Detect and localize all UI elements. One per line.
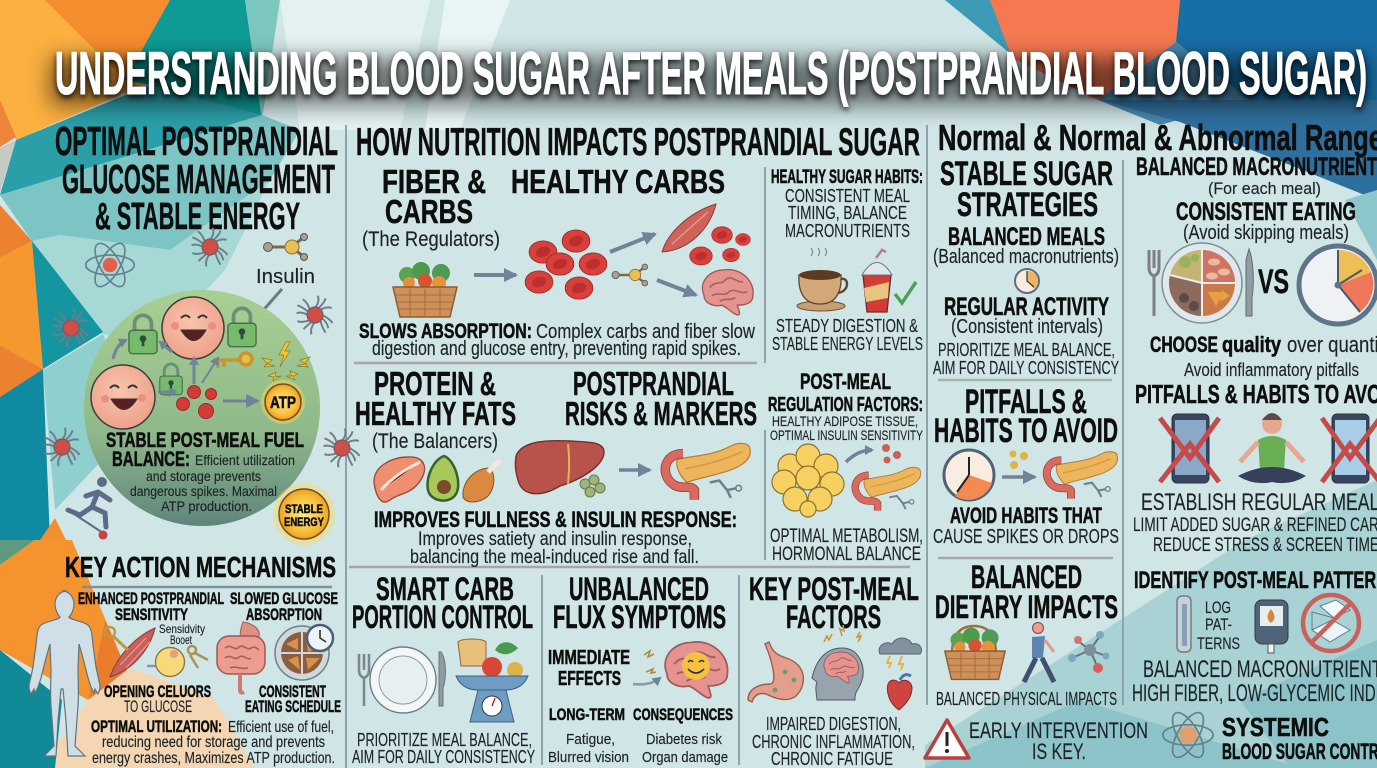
heading: unbalanced flux: UNBALANCED (569, 571, 709, 607)
text: stable post-meal fuel balance: dangerous spikes. Maximal (130, 483, 277, 499)
icon: test strip (1177, 596, 1191, 652)
text: stable post-meal fuel balance: and storage prevents (146, 468, 261, 484)
panel: normal and abnormal range (925, 117, 1377, 764)
subpanel: healthy sugar habits (771, 167, 923, 354)
icon: insulin molecule (264, 234, 308, 260)
icon: muscle with key (105, 627, 155, 677)
heading: protein and risks: (The Balancers) (372, 430, 498, 453)
icon: digestive tract (217, 622, 265, 693)
text: high fiber (1132, 656, 1377, 707)
text: steady digestion: STABLE ENERGY LEVELS (772, 334, 923, 354)
heading: balanced dietary impacts: DIETARY IMPACTS (935, 589, 1118, 625)
icon: storm cloud (879, 638, 922, 670)
icon: adipose small (580, 475, 605, 497)
icon: glucose dots and arrow (1002, 450, 1035, 477)
text: opening cells and schedule: OPENING CELUORS (104, 682, 211, 701)
subpanel: identify post-meal patterns (1132, 567, 1377, 707)
text: prioritize meal balance (352, 730, 535, 767)
subpanel: macronutrients and consistency (1136, 153, 1377, 380)
text: steady digestion (772, 316, 923, 354)
icon: arrows (113, 340, 258, 401)
icon: molecule cluster (1068, 631, 1110, 673)
heading: pitfalls: HABITS TO AVOID (934, 412, 1118, 450)
icon: chicken leg (463, 460, 500, 502)
callout: early intervention (925, 718, 1148, 764)
heading: protein and risks: POSTPRANDIAL (573, 365, 734, 402)
icon: molecule (612, 264, 648, 286)
text: regular activity (933, 293, 1119, 378)
callout: systemic blood sugar control (1163, 708, 1377, 764)
text: vs: VS (1258, 263, 1289, 301)
text: regulation factors: HEALTHY ADIPOSE TISSUE, (772, 413, 918, 429)
text: immediate effects: EFFECTS (558, 668, 621, 690)
heading: fiber and carbs: CARBS (385, 193, 473, 230)
icon: padlocks (129, 308, 256, 395)
icon: plate, fork, knife (359, 647, 445, 713)
icon: clock (944, 450, 994, 500)
icon: timing clock (1299, 246, 1377, 324)
heading: key post-meal factors: KEY POST-MEAL (749, 571, 919, 607)
icon: no sugar cubes (1303, 595, 1359, 651)
text: opening cells and schedule: TO GLUCOSE (124, 697, 192, 716)
icon: crossed phone (1160, 414, 1219, 483)
icon: fat cell with keys (147, 646, 208, 676)
text: balanced physical impacts: BALANCED PHYSICAL IMPACTS (936, 689, 1117, 709)
text: early intervention: IS KEY. (1032, 739, 1086, 764)
subpanel: stable sugar strategies (933, 155, 1119, 378)
subpanel: smart carb portion control (352, 571, 535, 767)
text: regular activity: (Consistent intervals) (951, 316, 1103, 338)
text: optimal metabolism: OPTIMAL METABOLISM, (770, 526, 923, 547)
heading: smart carb: SMART CARB (376, 571, 514, 607)
icon: systemic atom (1163, 708, 1213, 762)
text: systemic: SYSTEMIC (1222, 712, 1329, 742)
heading: fiber and carbs: FIBER & (382, 163, 486, 200)
text: log patterns (1197, 598, 1240, 653)
text: long-term consequences: Blurred vision (548, 749, 629, 766)
icon: plate with clock (275, 625, 333, 680)
heading: smart carb: PORTION CONTROL (352, 599, 533, 635)
text: establish regular meals (1133, 489, 1377, 556)
text: stable post-meal fuel balance: STABLE POST-MEAL FUEL (106, 429, 304, 452)
text: choose quality (1150, 332, 1377, 380)
text: slows absorption (359, 320, 755, 360)
text: optimal utilization: OPTIMAL UTILIZATION: (91, 717, 222, 736)
text: early intervention (969, 718, 1148, 764)
heading: optimal postprandial glucose management: GLUCOSE MANAGEMENT (62, 156, 335, 202)
text: choose quality: CHOOSE (1150, 332, 1218, 357)
text: balanced meals: (Balanced macronutrients) (933, 246, 1119, 268)
heading: fiber and carbs: (The Regulators) (362, 228, 500, 251)
text: improves fullness: balancing the meal-induced rise and fall. (410, 547, 699, 568)
text: long-term consequences: LONG-TERM (549, 705, 625, 724)
icon: warning triangle (925, 720, 969, 758)
icon: drink (862, 250, 892, 312)
icon: happy cells (91, 297, 224, 429)
arrows: flow (474, 234, 696, 295)
text: long-term consequences: Organ damage (642, 749, 728, 766)
subpanel: post-meal regulation factors (768, 369, 923, 565)
heading: smart carb (352, 571, 533, 635)
icon: food on scale (456, 639, 528, 722)
text: regulation factors (768, 369, 923, 443)
icon: pancreas (1047, 452, 1118, 499)
text: optimal utilization: reducing need for storage and prevents (102, 734, 325, 751)
text: opening cells and schedule (104, 682, 341, 716)
text: choose quality: quality (1222, 332, 1282, 357)
text: slowed glucose absorption: SLOWED GLUCOSE (230, 589, 338, 608)
subpanel: fiber and healthy carbs (359, 163, 755, 360)
icon: key (213, 353, 252, 368)
diagram: green metabolism circle (84, 290, 320, 526)
text: optimal metabolism (770, 526, 923, 565)
badge: stable energy (273, 483, 335, 545)
text: optimal utilization (91, 717, 335, 767)
text: impaired digestion: CHRONIC INFLAMMATION, (752, 732, 915, 752)
panel: key action mechanisms (29, 552, 341, 767)
heading: how nutrition impacts postprandial sugar: HOW NUTRITION IMPACTS POSTPRANDIAL SUGAR (356, 121, 920, 164)
text: regular activity: AIM FOR DAILY CONSISTENCY (933, 358, 1119, 378)
text: enhanced sensitivity: Booet (170, 633, 192, 647)
panel: how nutrition impacts (352, 121, 923, 768)
heading: pitfalls: PITFALLS & (965, 383, 1087, 421)
icon: atom (86, 239, 134, 291)
text: enhanced sensitivity: Sensidvity (159, 622, 205, 636)
column dividers (82, 125, 1123, 768)
icon: glucometer (1255, 600, 1288, 653)
text: healthy sugar habits (771, 167, 923, 241)
text: opening cells and schedule: CONSISTENT (259, 682, 326, 701)
text: immediate effects (548, 647, 630, 690)
arrow and dots (846, 444, 901, 464)
text: healthy sugar habits: CONSISTENT MEAL (785, 186, 910, 206)
subpanel: key post-meal factors (748, 571, 922, 768)
arrow (619, 468, 650, 472)
icon: avocado (427, 456, 458, 501)
text: balanced macronutrients: (For each meal) (1208, 179, 1321, 198)
heading: pitfalls (934, 383, 1118, 450)
heading: unbalanced flux: FLUX SYMPTOMS (553, 599, 726, 635)
label: insulin: Insulin (256, 266, 315, 288)
badge: stable energy: ENERGY (284, 515, 324, 529)
text: balanced macronutrients (1136, 153, 1377, 244)
text: impaired digestion: IMPAIRED DIGESTION, (766, 714, 901, 734)
icon: meditating person (1238, 413, 1306, 483)
text: long-term consequences (548, 705, 733, 766)
text: enhanced sensitivity (78, 589, 224, 647)
text: long-term consequences: Diabetes risk (646, 731, 722, 748)
heading: stable sugar strategies: STABLE SUGAR (940, 155, 1113, 193)
text: improves fullness: Improves satiety and insulin response, (418, 529, 692, 550)
text: stable post-meal fuel balance: ATP production. (161, 498, 252, 514)
heading: optimal postprandial glucose management: OPTIMAL POSTPRANDIAL (55, 118, 338, 164)
subpanel: pitfalls and habits to avoid (1133, 379, 1377, 556)
text: balanced meals (933, 223, 1119, 268)
icon: head with brain (812, 625, 863, 700)
icon: virus cells (44, 228, 360, 467)
heading: protein and risks: PROTEIN & (374, 365, 496, 402)
subpanel: protein and healthy fats (355, 365, 757, 568)
heading: protein and risks: HEALTHY FATS (355, 395, 516, 432)
text: steady digestion: STEADY DIGESTION & (776, 316, 918, 336)
text: long-term consequences: CONSEQUENCES (633, 705, 733, 724)
figure: human silhouette (29, 591, 100, 756)
text: log patterns: LOG (1205, 598, 1231, 617)
text: regular activity: PRIORITIZE MEAL BALANCE, (938, 340, 1115, 360)
subpanel: balanced dietary impacts (935, 559, 1118, 709)
icon: brain with smile (633, 642, 728, 698)
icon: brain (702, 270, 753, 315)
subpanel: unbalanced flux symptoms (548, 571, 733, 766)
icon: lightning (262, 342, 310, 381)
icon: liver (515, 441, 604, 494)
text: regulation factors: REGULATION FACTORS: (768, 394, 923, 416)
heading: key action mechanisms: KEY ACTION MECHANISMS (65, 552, 336, 584)
text: regulation factors: OPTIMAL INSULIN SENSITIVITY (770, 427, 923, 443)
icon: heart (887, 675, 912, 710)
text: improves fullness (374, 507, 737, 568)
text: stable post-meal fuel balance: BALANCE: (112, 448, 190, 471)
icon: fat cell cluster (772, 444, 844, 517)
label: insulin (256, 266, 315, 315)
subpanel: pitfalls and habits (933, 383, 1119, 548)
text: log patterns: PAT- (1205, 615, 1232, 634)
icon: walking person (1024, 622, 1054, 682)
heading: key post-meal factors: FACTORS (786, 599, 881, 635)
heading: stable sugar strategies: STRATEGIES (957, 186, 1098, 224)
icon: ATP sun: ATP (270, 393, 296, 412)
icon: ATP sun (261, 380, 305, 424)
heading: fiber and carbs (362, 163, 725, 251)
heading: stable sugar strategies (940, 155, 1113, 224)
text: slows absorption: SLOWS ABSORPTION: (359, 320, 532, 343)
icon: small clock (1015, 269, 1039, 293)
text: slowed glucose absorption: ABSORPTION (246, 605, 322, 624)
heading: optimal postprandial glucose management: & STABLE ENERGY (95, 196, 300, 238)
icon: vegetable basket (393, 262, 457, 317)
icon: food basket (945, 626, 1005, 679)
icon: stomach (748, 642, 803, 702)
icon: muscle (662, 204, 716, 252)
icon: glucose dots (176, 386, 216, 418)
icon: red blood cells (525, 227, 750, 299)
heading: fiber and carbs: HEALTHY CARBS (511, 163, 725, 200)
text: slows absorption: digestion and glucose entry, preventing rapid spikes. (372, 338, 741, 360)
text: enhanced sensitivity: ENHANCED POSTPRANDIAL (78, 589, 224, 608)
text: avoid habits: CAUSE SPIKES OR DROPS (933, 526, 1119, 548)
icon: runner (68, 477, 110, 540)
badge: stable energy: STABLE (285, 502, 323, 516)
text: optimal utilization: Efficient use of fuel, (228, 719, 334, 736)
text: immediate effects: IMMEDIATE (548, 647, 630, 669)
text: stable post-meal fuel balance (106, 429, 304, 514)
text: regular activity: REGULAR ACTIVITY (944, 293, 1109, 321)
text: healthy sugar habits: TIMING, BALANCE (788, 203, 907, 223)
heading: balanced dietary impacts: BALANCED (971, 559, 1082, 595)
icon: salmon (374, 457, 425, 502)
text: prioritize meal balance: AIM FOR DAILY CONSISTENCY (352, 747, 535, 767)
text: prioritize meal balance: PRIORITIZE MEAL BALANCE, (357, 730, 532, 750)
heading: key post-meal factors (749, 571, 919, 635)
text: optimal utilization: energy crashes, Maximizes ATP production. (92, 750, 335, 767)
text: log patterns: TERNS (1197, 634, 1240, 653)
text: avoid habits: AVOID HABITS THAT (950, 503, 1102, 528)
text: long-term consequences: Fatigue, (566, 731, 615, 748)
text: slowed glucose absorption (230, 589, 338, 624)
text: improves fullness: IMPROVES FULLNESS & INSULIN RESPONSE: (374, 507, 737, 532)
heading: balanced dietary impacts (935, 559, 1118, 625)
heading: optimal postprandial glucose management (55, 118, 338, 238)
text: avoid habits (933, 503, 1119, 548)
text: slows absorption: Complex carbs and fiber slow (536, 321, 755, 343)
text: regulation factors: POST-MEAL (800, 369, 891, 394)
icon: pancreas (855, 467, 921, 511)
heading: protein and risks (355, 365, 757, 453)
text: healthy sugar habits: HEALTHY SUGAR HABITS: (771, 167, 923, 188)
heading: protein and risks: RISKS & MARKERS (565, 395, 757, 432)
text: optimal metabolism: HORMONAL BALANCE (772, 544, 921, 565)
icon: pancreas (665, 443, 750, 500)
text: healthy sugar habits: MACRONUTRIENTS (785, 221, 910, 241)
icon: second crossed phone (1322, 414, 1377, 483)
text: opening cells and schedule: EATING SCHEDULE (245, 697, 341, 716)
text: balanced meals: BALANCED MEALS (948, 223, 1105, 251)
text: early intervention: EARLY INTERVENTION (969, 718, 1148, 743)
text: enhanced sensitivity: SENSITIVITY (115, 605, 188, 624)
text: systemic (1222, 712, 1377, 764)
icon: coffee cup (797, 248, 847, 311)
heading: unbalanced flux (553, 571, 726, 635)
icon: check mark (895, 282, 916, 303)
panel: optimal glucose management (44, 118, 360, 545)
text: impaired digestion (752, 714, 915, 768)
text: stable post-meal fuel balance: Efficient utilization (195, 452, 295, 468)
icon: fork, plate, knife (1149, 243, 1253, 323)
